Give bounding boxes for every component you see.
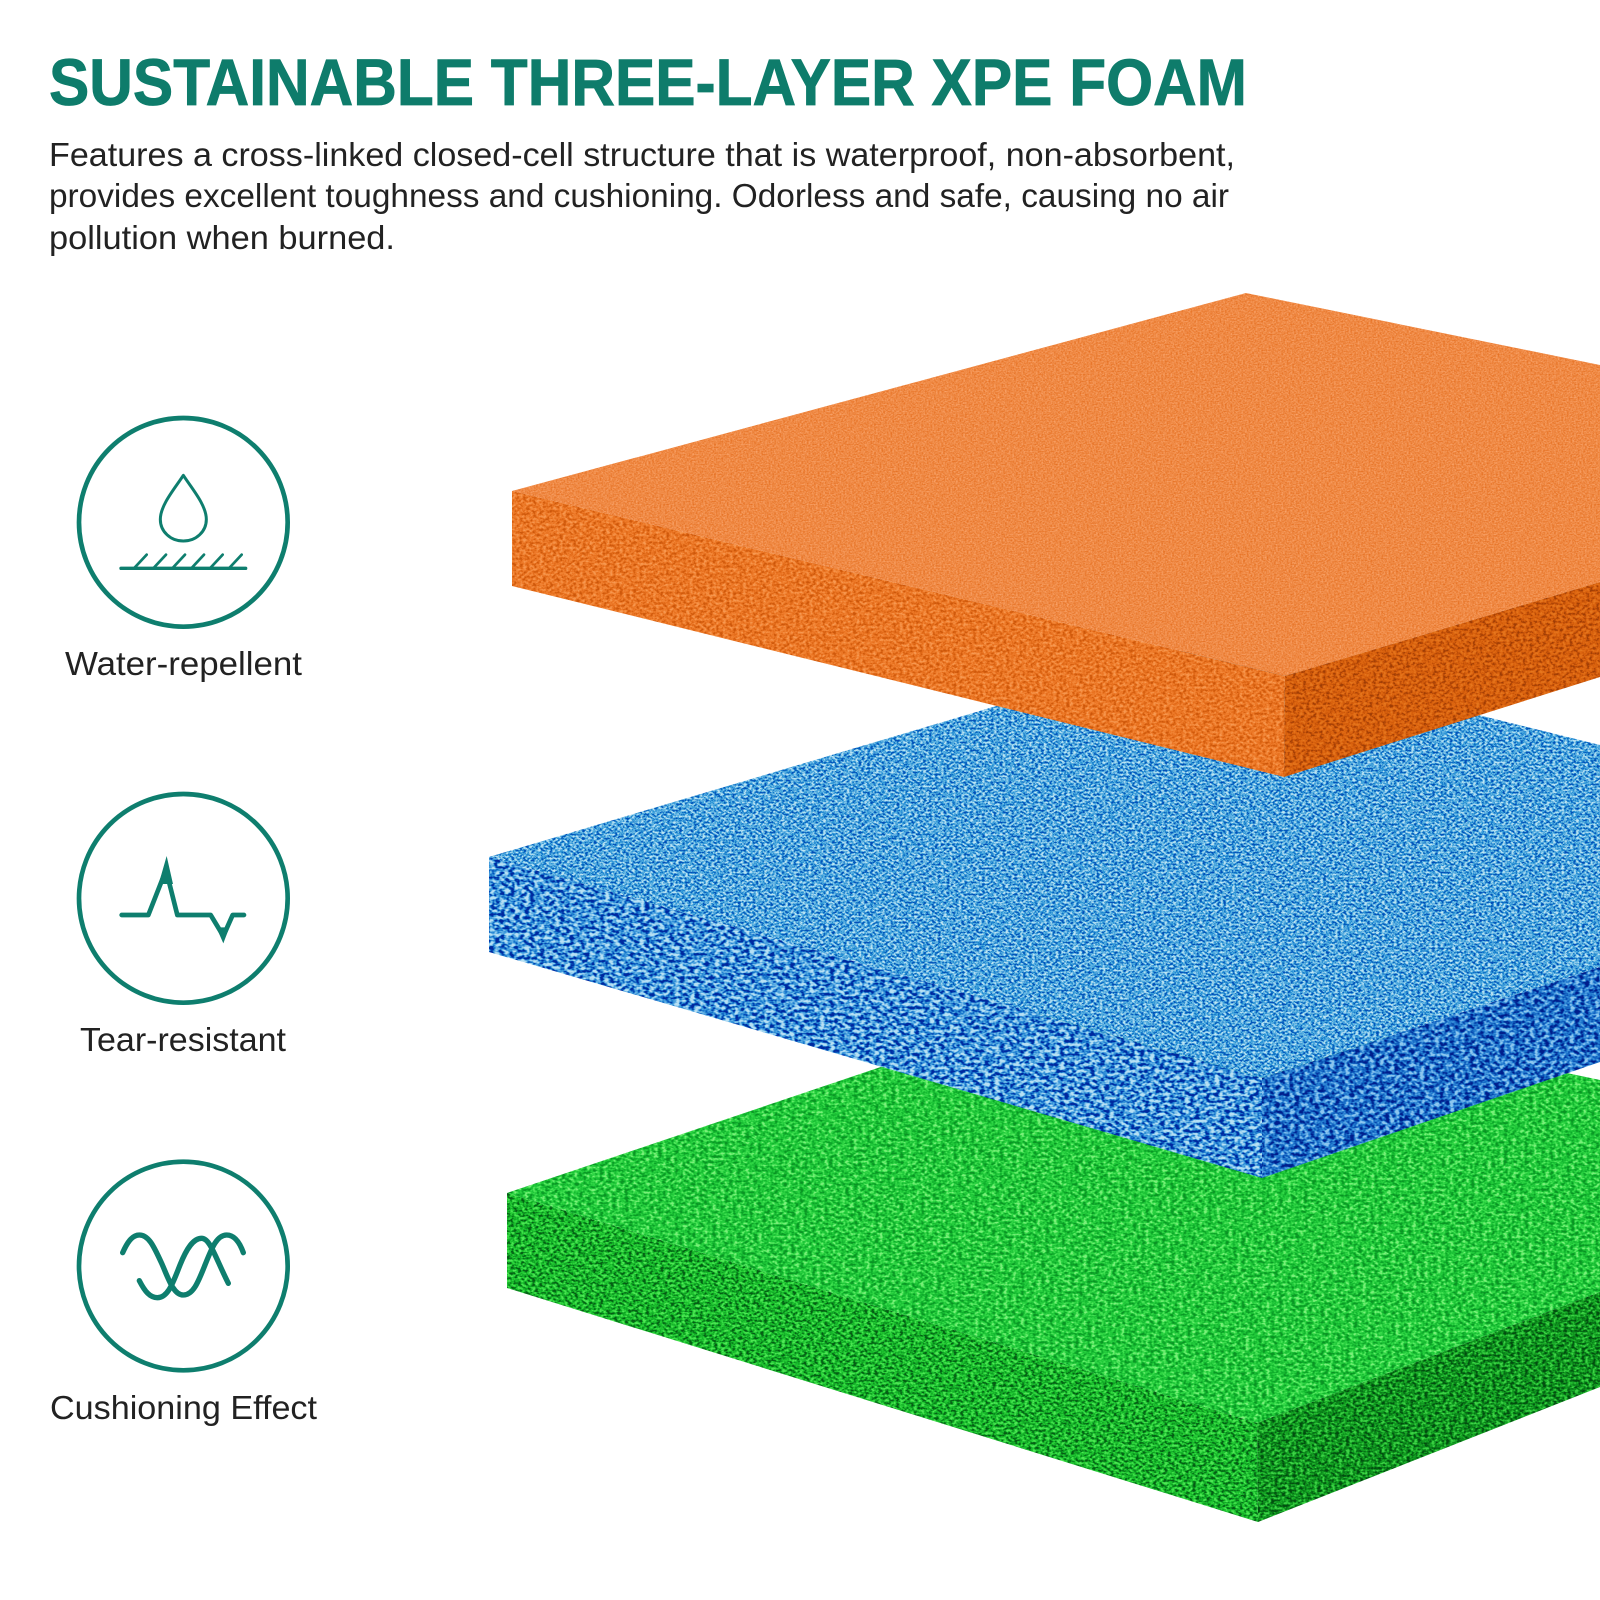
icon: tear spike line — [79, 794, 288, 1003]
title: SUSTAINABLE THREE-LAYER XPE FOAM — [49, 45, 1247, 119]
description text — [49, 136, 1235, 256]
description text: provides excellent toughness and cushioning. Odorless and safe, causing no air — [49, 177, 1229, 214]
label: tear-resistant: Tear-resistant — [80, 1021, 286, 1058]
description text: pollution when burned. — [49, 219, 395, 256]
feature: water-repellent — [65, 418, 302, 682]
feature: tear-resistant — [79, 794, 288, 1058]
foam layer: blue — [489, 646, 1600, 1178]
icon: water drop on surface — [79, 418, 288, 627]
label: cushioning effect: Cushioning Effect — [50, 1389, 317, 1426]
feature: cushioning effect — [50, 1162, 317, 1426]
foam layer: orange — [512, 293, 1600, 777]
label: water-repellent: Water-repellent — [65, 645, 302, 682]
foam layer: green — [507, 982, 1600, 1522]
description text: Features a cross-linked closed-cell structure that is waterproof, non-absorbent, — [49, 136, 1235, 173]
icon: cushioning waves — [79, 1162, 288, 1370]
